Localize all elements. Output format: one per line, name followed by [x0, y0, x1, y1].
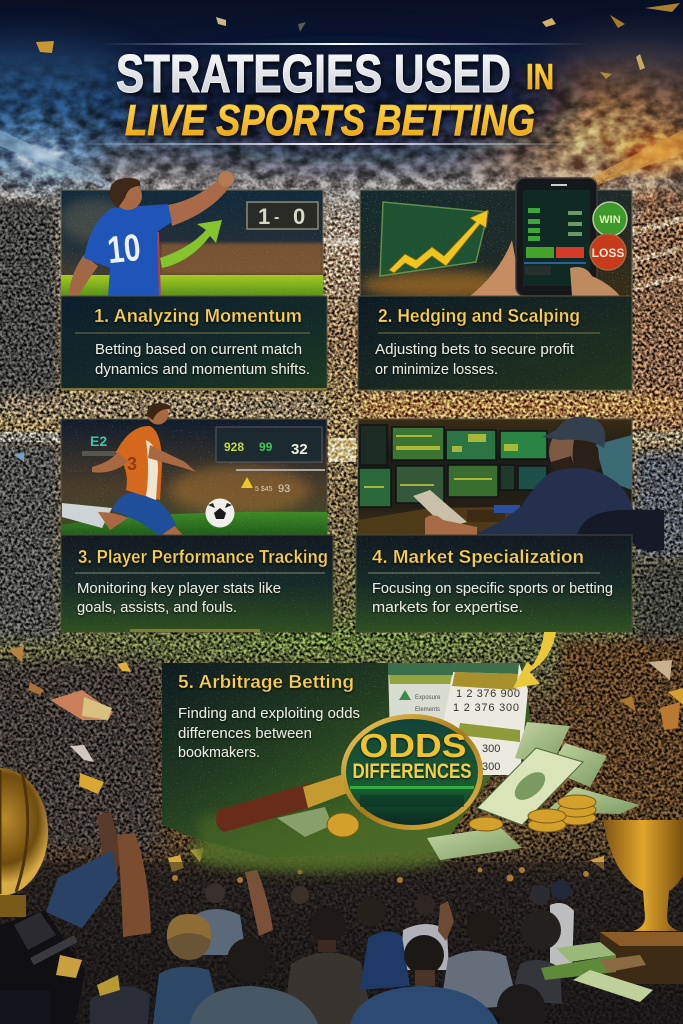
stats board left: E2	[90, 433, 107, 449]
description 3: goals, assists, and fouls.	[77, 600, 237, 616]
momentum image	[60, 171, 323, 298]
description 5: bookmakers.	[178, 745, 260, 761]
trading desk image	[358, 416, 664, 551]
heading 5: 5. Arbitrage Betting	[178, 672, 354, 692]
icon: magnifying glass	[216, 714, 483, 832]
stats board left	[82, 433, 157, 456]
icon: odds tickets: Exposure	[415, 695, 441, 701]
description 3: Monitoring key player stats like	[77, 581, 281, 597]
title line 1: IN	[526, 56, 554, 97]
icon: curved yellow arrow	[513, 632, 556, 688]
icon: odds tickets: 300	[482, 761, 500, 773]
monitors	[359, 425, 547, 507]
paper sheet	[413, 490, 467, 528]
score board: 1	[258, 204, 270, 229]
stats board right	[216, 427, 322, 462]
player in orange jersey	[62, 403, 196, 536]
description 5: Finding and exploiting odds	[178, 706, 360, 722]
icon: warning triangle and stat: 93	[278, 483, 290, 495]
description 4: markets for expertise.	[372, 600, 523, 616]
title shine lines	[70, 43, 600, 145]
panel 2: hedging and scalping	[358, 178, 632, 390]
panel 4: market specialization	[356, 416, 664, 632]
description 1	[95, 342, 310, 378]
icon: odds tickets: Elements	[415, 707, 440, 713]
office chair	[577, 510, 664, 551]
arbitrage card	[162, 663, 530, 872]
smartphone	[516, 178, 597, 296]
heading 4: 4. Market Specialization	[372, 547, 584, 567]
desk and keyboard	[358, 505, 560, 536]
text card 4	[356, 535, 632, 632]
loss badge	[590, 234, 626, 270]
title line 2: LIVE SPORTS BETTING	[125, 96, 535, 145]
description 1: Betting based on current match	[95, 342, 302, 358]
description 2	[375, 342, 574, 378]
description 5	[178, 706, 360, 761]
golden globe at left	[0, 768, 48, 917]
title	[116, 44, 554, 145]
trophy at right	[600, 820, 683, 984]
description 2: or minimize losses.	[375, 362, 498, 378]
score board: -	[274, 209, 279, 226]
icon: odds tickets: 300	[482, 743, 500, 755]
loss badge: LOSS	[592, 246, 624, 260]
stats board right: 99	[259, 440, 273, 454]
description 4	[372, 581, 613, 616]
magnifier label	[352, 727, 472, 783]
text card 2	[358, 296, 632, 390]
text card 3	[61, 535, 333, 632]
icon: rising yellow arrow	[389, 210, 488, 273]
title line 1: STRATEGIES USED	[116, 44, 511, 104]
icon: green trend arrow	[160, 220, 222, 268]
icon: odds tickets: 1 2 376 300	[453, 702, 519, 714]
score board: 0	[293, 204, 305, 229]
description 2: Adjusting bets to secure profit	[375, 342, 574, 358]
panel 3: player performance tracking	[61, 403, 333, 632]
stats board right: 928	[224, 440, 244, 454]
stats board right: 32	[291, 441, 308, 458]
player in orange jersey: 3	[127, 454, 137, 474]
panel 5: arbitrage betting	[162, 632, 640, 872]
icon: warning triangle and stat: 5 $45	[255, 486, 273, 493]
icon: gold coins	[327, 795, 596, 837]
win badge: WIN	[599, 214, 621, 226]
description 4: Focusing on specific sports or betting	[372, 581, 613, 597]
hand right	[570, 267, 620, 296]
heading 2: 2. Hedging and Scalping	[378, 306, 580, 326]
background spectators	[190, 880, 574, 971]
score board	[247, 202, 318, 229]
panel 1: analyzing momentum	[60, 171, 327, 390]
bottom crowd silhouettes	[0, 812, 683, 1024]
raised arms	[46, 812, 454, 941]
hedging image	[360, 178, 632, 299]
line chart board	[380, 202, 488, 276]
magnifier label: ODDS	[360, 727, 466, 764]
win badge	[593, 202, 627, 236]
cash pile at bottom right	[541, 942, 653, 1002]
heading 3: 3. Player Performance Tracking	[78, 547, 328, 567]
icon: odds tickets	[388, 663, 528, 775]
player image	[61, 403, 327, 536]
player in blue jersey	[68, 171, 234, 297]
player in blue jersey: 10	[105, 227, 143, 272]
soccer ball	[206, 498, 234, 528]
cash stack	[277, 722, 640, 860]
heading 1: 1. Analyzing Momentum	[94, 306, 302, 326]
analyst in cap	[425, 416, 638, 536]
description 5: differences between	[178, 726, 312, 742]
description 1: dynamics and momentum shifts.	[95, 362, 310, 378]
front spectators	[153, 898, 562, 1024]
magnifier label: DIFFERENCES	[352, 760, 472, 783]
hand left	[470, 240, 522, 296]
icon: warning triangle and stat	[236, 469, 325, 495]
left dark camera gear	[0, 910, 150, 1024]
description 3	[77, 581, 281, 616]
icon: odds tickets: 1 2 376 900	[456, 688, 520, 700]
text card 1	[61, 296, 327, 390]
